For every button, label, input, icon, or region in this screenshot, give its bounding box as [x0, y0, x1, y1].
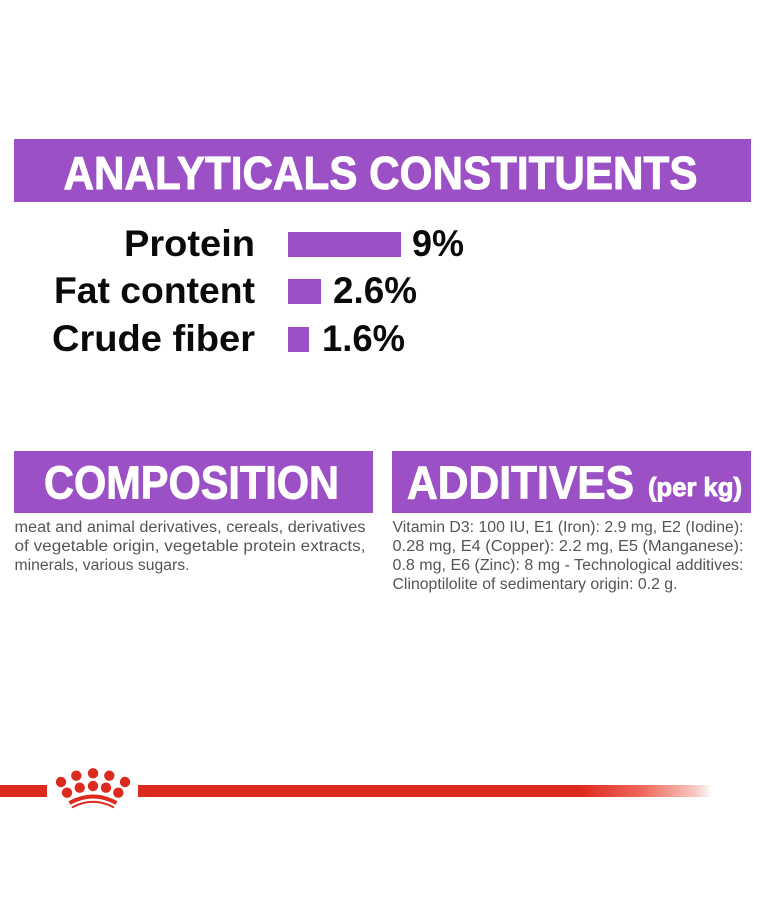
row: protein: 9%: [412, 223, 464, 264]
text block: composition: meat and animal derivatives, cereals, derivatives: [14, 519, 366, 536]
footer rule: left red bar: [0, 785, 47, 797]
row: fat content: Fat content: [54, 270, 255, 311]
panel: additives header: [392, 451, 751, 513]
text block: composition: minerals, various sugars.: [14, 557, 190, 574]
text block: additives: [392, 519, 744, 593]
icon: royal crown logo: [56, 768, 130, 808]
heading: composition: COMPOSITION: [44, 456, 339, 508]
text block: additives: Clinoptilolite of sedimentary origin: 0.2 g.: [392, 576, 678, 593]
footer rule: right red bar fading out: [138, 785, 712, 797]
title: analyticals constituents: ANALYTICALS CONSTITUENTS: [64, 147, 698, 199]
row: protein: [124, 223, 464, 264]
panel: analyticals constituents header: [14, 139, 751, 202]
text block: additives: 0.28 mg, E4 (Copper): 2.2 mg, E5 (Manganese):: [392, 538, 744, 555]
text block: composition: of vegetable origin, vegetable protein extracts,: [14, 538, 366, 555]
heading: per kg: (per kg): [648, 472, 742, 502]
row: crude fiber: 1.6%: [322, 318, 405, 359]
text block: composition: [14, 519, 366, 574]
row: crude fiber: [52, 318, 405, 359]
text block: additives: 0.8 mg, E6 (Zinc): 8 mg - Technological additives:: [392, 557, 744, 574]
heading: additives: ADDITIVES: [407, 456, 634, 508]
row: crude fiber: Crude fiber: [52, 318, 255, 359]
row: fat content: 2.6%: [333, 270, 417, 311]
bar chart: analytical constituents: [52, 223, 464, 359]
text block: additives: Vitamin D3: 100 IU, E1 (Iron): 2.9 mg, E2 (Iodine):: [392, 519, 744, 536]
row: fat content: [54, 270, 417, 311]
row: protein: Protein: [124, 223, 255, 264]
panel: composition header: [14, 451, 373, 513]
